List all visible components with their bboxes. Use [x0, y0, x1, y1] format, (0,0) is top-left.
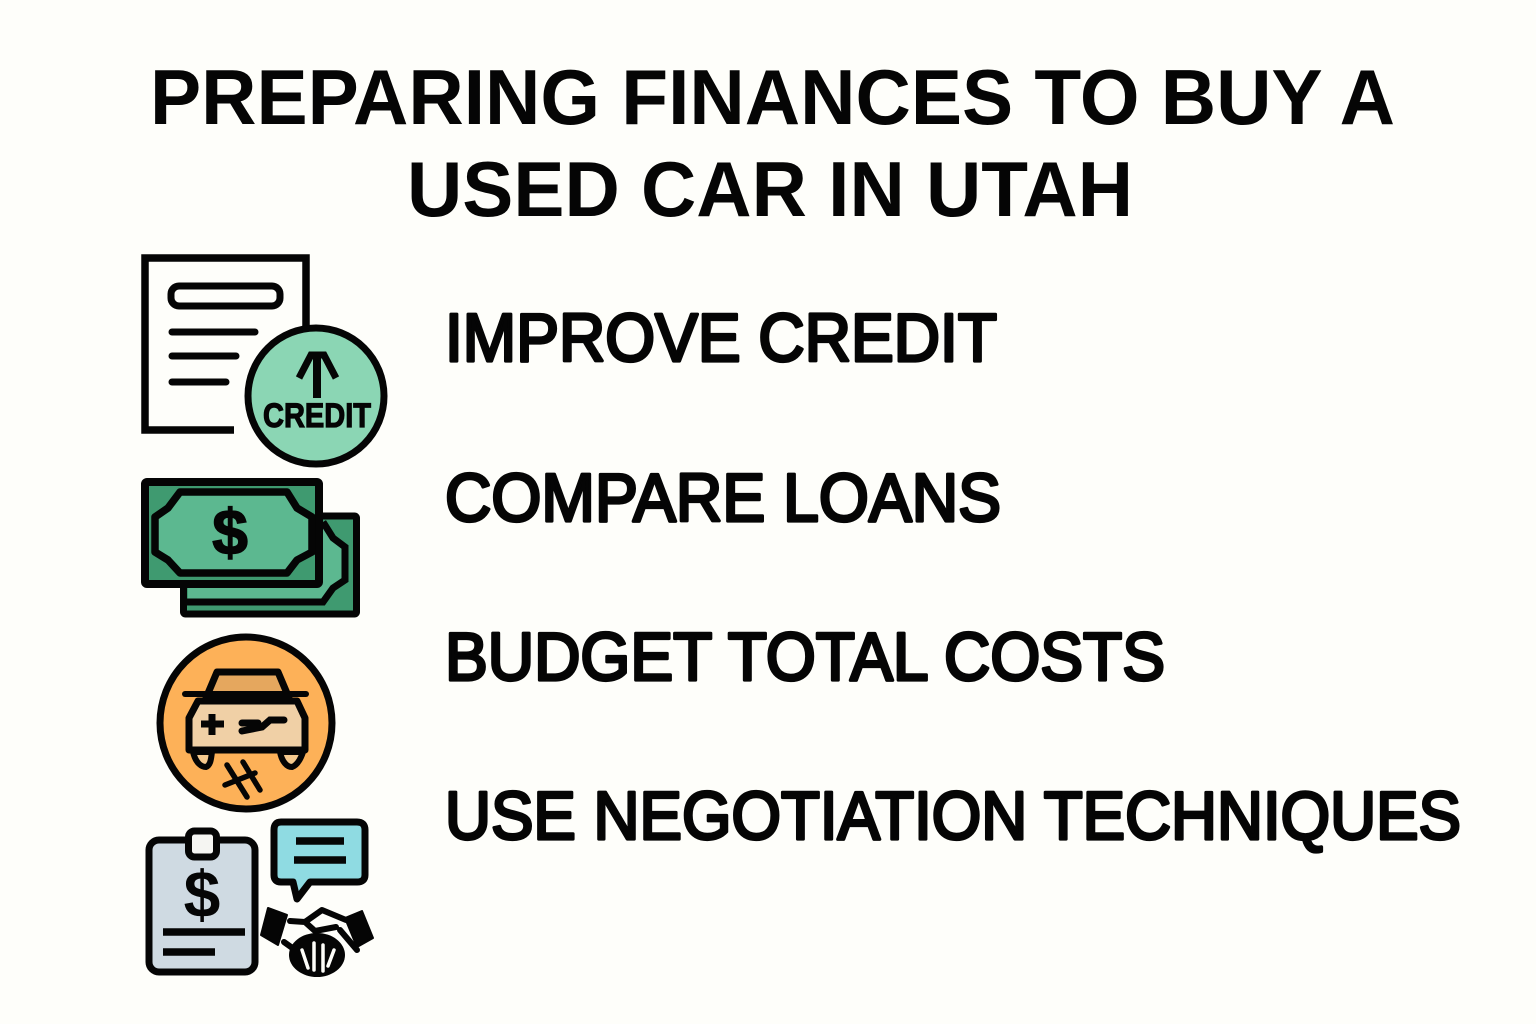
- list: steps: [445, 300, 1461, 854]
- step 3: BUDGET TOTAL COSTS: [445, 619, 1165, 695]
- icon: money bills: [145, 482, 356, 614]
- clipboard: $: [184, 857, 220, 931]
- title: PREPARING FINANCES TO BUY A: [150, 53, 1395, 141]
- step 2: COMPARE LOANS: [445, 460, 1001, 536]
- icon: credit report: CREDIT: [263, 397, 371, 435]
- step 4: USE NEGOTIATION TECHNIQUES: [445, 778, 1461, 854]
- icon: car budget: [160, 637, 332, 809]
- speech bubble: [274, 822, 365, 899]
- icon: credit report: [145, 258, 384, 464]
- step 1: IMPROVE CREDIT: [445, 300, 997, 376]
- title: USED CAR IN UTAH: [407, 145, 1133, 233]
- clipboard: [149, 831, 255, 972]
- handshake: [261, 908, 373, 977]
- icon: money bills: $: [212, 496, 248, 568]
- icon: negotiation clipboard, speech bubble, handshake: [149, 822, 373, 977]
- title: [150, 53, 1395, 233]
